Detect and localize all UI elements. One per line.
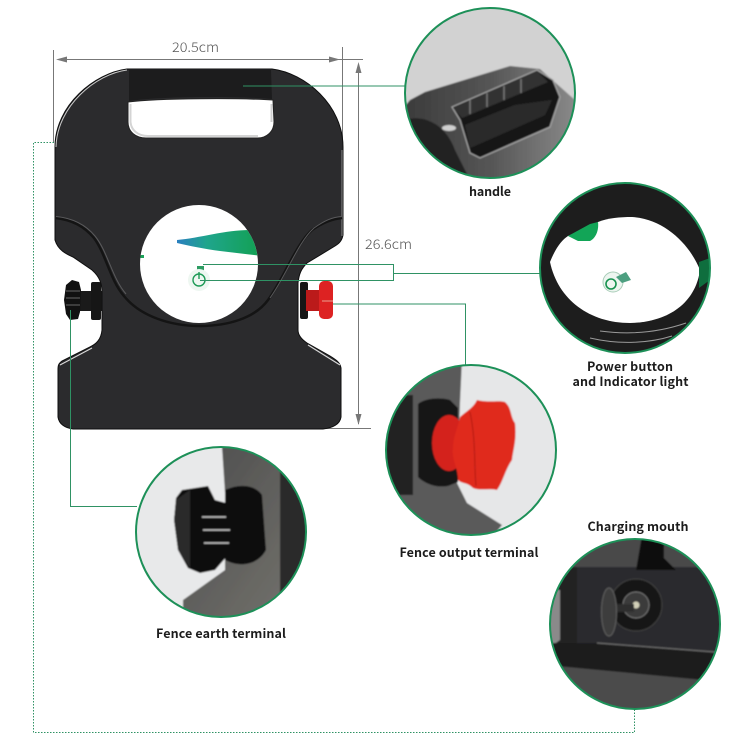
- label: handle: handle: [469, 181, 511, 200]
- label: power button and indicator light: [572, 356, 689, 390]
- device: fence energizer front view: [55, 69, 343, 429]
- leader: power button and indicator: [200, 264, 540, 280]
- label: charging mouth: Charging mouth: [588, 516, 688, 535]
- detail circle: power button: [535, 178, 715, 358]
- dimension: width 20.5cm: [54, 36, 363, 150]
- detail circle: fence earth terminal: [135, 446, 307, 618]
- label: power button and indicator light: Power button: [587, 356, 673, 375]
- detail circle: handle: [400, 5, 580, 185]
- detail circle: fence output terminal: [380, 360, 560, 540]
- dimension: width 20.5cm: 20.5cm: [172, 36, 219, 56]
- dimension: height 26.6cm: [325, 62, 412, 428]
- label: power button and indicator light: and Indicator light: [572, 371, 689, 390]
- center window: [140, 205, 258, 323]
- leader: fence output terminal: [333, 304, 466, 366]
- leader: charging mouth dotted: [34, 142, 634, 732]
- left earth knob: [64, 280, 102, 320]
- label: fence earth terminal: Fence earth terminal: [156, 623, 286, 642]
- power indicator icon: [188, 266, 210, 291]
- detail circle: charging mouth: [545, 535, 725, 715]
- leader: fence earth terminal: [70, 310, 137, 506]
- right red output knob: [300, 281, 333, 319]
- body highlight edges: [56, 70, 127, 147]
- label: fence output terminal: Fence output terminal: [400, 542, 539, 561]
- device body: [55, 69, 343, 429]
- leader: handle: [243, 85, 405, 87]
- groove line: [56, 216, 342, 326]
- dimension: height 26.6cm: 26.6cm: [365, 233, 412, 253]
- green reflection in window: [139, 230, 262, 258]
- handle opening: [128, 99, 274, 138]
- handle grip: [129, 70, 272, 101]
